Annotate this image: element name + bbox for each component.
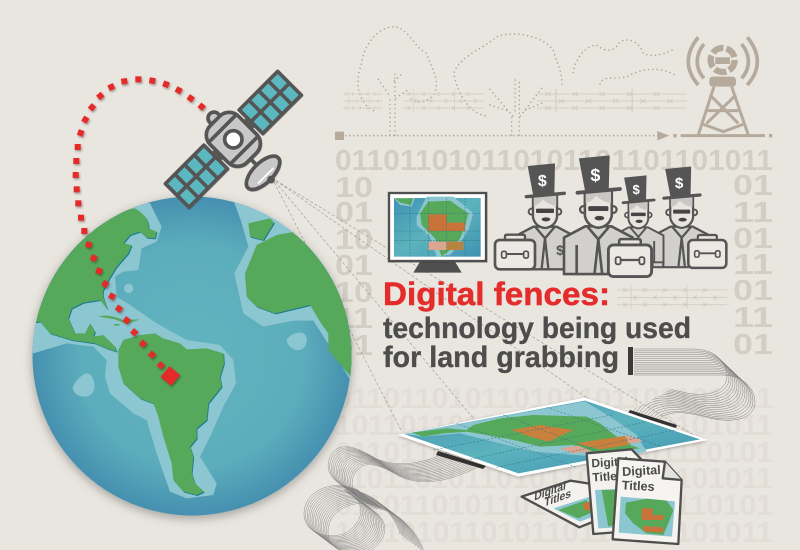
antenna tower xyxy=(681,37,765,136)
solar panel: lower xyxy=(165,145,227,207)
top illustration: dotted trees and fences xyxy=(335,27,772,140)
barbed wire fences xyxy=(343,89,687,112)
binary code pattern: 101101011010110110110101011 xyxy=(335,517,773,549)
small fence beside the title xyxy=(617,285,727,309)
dish xyxy=(251,160,258,166)
monitor map xyxy=(394,197,481,257)
businessmen with top hats and briefcases xyxy=(495,155,726,277)
bars where ribbons meet the map xyxy=(436,410,677,469)
document in front xyxy=(613,458,682,544)
businessman two: $ xyxy=(590,165,600,185)
satellite xyxy=(153,59,330,236)
landmasses xyxy=(32,202,352,498)
binary code pattern: 011011010110101101101101011 xyxy=(335,383,773,415)
document standing behind: Digital xyxy=(591,454,628,470)
dotted ground line with arrow xyxy=(335,131,772,140)
document in front: Titles xyxy=(622,478,655,494)
briefcase right xyxy=(688,235,726,268)
subtitle line two: for land grabbing xyxy=(383,341,619,374)
monitor stand xyxy=(413,262,462,273)
binary code pattern: 01 xyxy=(733,170,773,202)
subtitle line one: technology being used xyxy=(383,312,691,345)
document lying flat: Titles xyxy=(544,488,572,510)
top knob xyxy=(206,110,222,127)
businessman one: $ xyxy=(538,173,547,190)
businessman four xyxy=(653,166,711,267)
briefcase left xyxy=(495,235,535,269)
binary code pattern: 01 xyxy=(335,197,373,229)
businessman one: $ xyxy=(556,242,564,258)
businessman three: $ xyxy=(632,182,640,197)
binary code pattern: 01 xyxy=(733,329,773,361)
satellite body xyxy=(201,107,266,172)
map land xyxy=(412,415,640,452)
digital title documents xyxy=(522,449,682,544)
binary code pattern: 01 xyxy=(733,275,773,307)
binary code pattern: 11 xyxy=(733,197,773,229)
binary code pattern: 10 xyxy=(335,277,373,309)
document lying flat xyxy=(522,480,610,527)
binary code pattern: 011011010110101101101110101 xyxy=(335,437,773,469)
dotted trees and clouds xyxy=(358,27,675,135)
document lying flat: Digital xyxy=(534,480,566,504)
binary code pattern: 01 xyxy=(335,330,373,362)
dotted satellite signal beams xyxy=(272,178,702,440)
binary code pattern: 11 xyxy=(733,249,773,281)
binary code pattern: 011011010110101101101110101 xyxy=(335,490,773,522)
binary code pattern: 011011010110101101101101011 xyxy=(335,145,773,177)
binary code pattern: 01 xyxy=(733,223,773,255)
businessman one xyxy=(514,163,576,269)
businessman three xyxy=(613,175,663,262)
coast shadows xyxy=(36,210,352,496)
title: digital fences: Digital fences: xyxy=(383,276,610,312)
binary code pattern: 10 xyxy=(335,172,373,204)
map grid xyxy=(433,407,675,467)
monitor with map xyxy=(389,193,486,273)
map white sheet xyxy=(397,398,708,477)
red dotted flight path xyxy=(73,76,206,386)
document in front: Digital xyxy=(622,463,661,479)
ribbon: top right data stream xyxy=(631,348,756,420)
ribbon: bottom left data stream xyxy=(304,447,479,550)
businessman four: $ xyxy=(675,175,684,192)
globe xyxy=(27,194,357,524)
shallow water shelves xyxy=(32,202,350,498)
monitor frame xyxy=(389,193,486,261)
binary code pattern: 11 xyxy=(733,302,773,334)
map shelf xyxy=(404,401,647,458)
solar panel connectors xyxy=(212,118,254,160)
document standing behind: Titles xyxy=(592,469,624,484)
continents xyxy=(36,208,352,495)
solar panel: upper xyxy=(239,71,301,133)
businessman two xyxy=(564,155,633,274)
map water xyxy=(404,401,700,473)
map highlighted plots xyxy=(512,425,643,453)
title block xyxy=(383,276,727,375)
tilted map xyxy=(397,398,708,477)
title end bar xyxy=(628,347,633,375)
binary code pattern: 11 xyxy=(335,303,373,335)
binary code pattern: 101101101011010110110101011 xyxy=(335,410,773,442)
binary code pattern: 10 xyxy=(335,224,373,256)
ocean xyxy=(32,196,352,516)
document standing behind xyxy=(587,449,645,534)
binary code pattern: 01 xyxy=(335,250,373,282)
binary code pattern: 110110101101011011010101011 xyxy=(335,463,773,495)
briefcase middle xyxy=(608,239,652,277)
binary code pattern xyxy=(335,145,773,549)
